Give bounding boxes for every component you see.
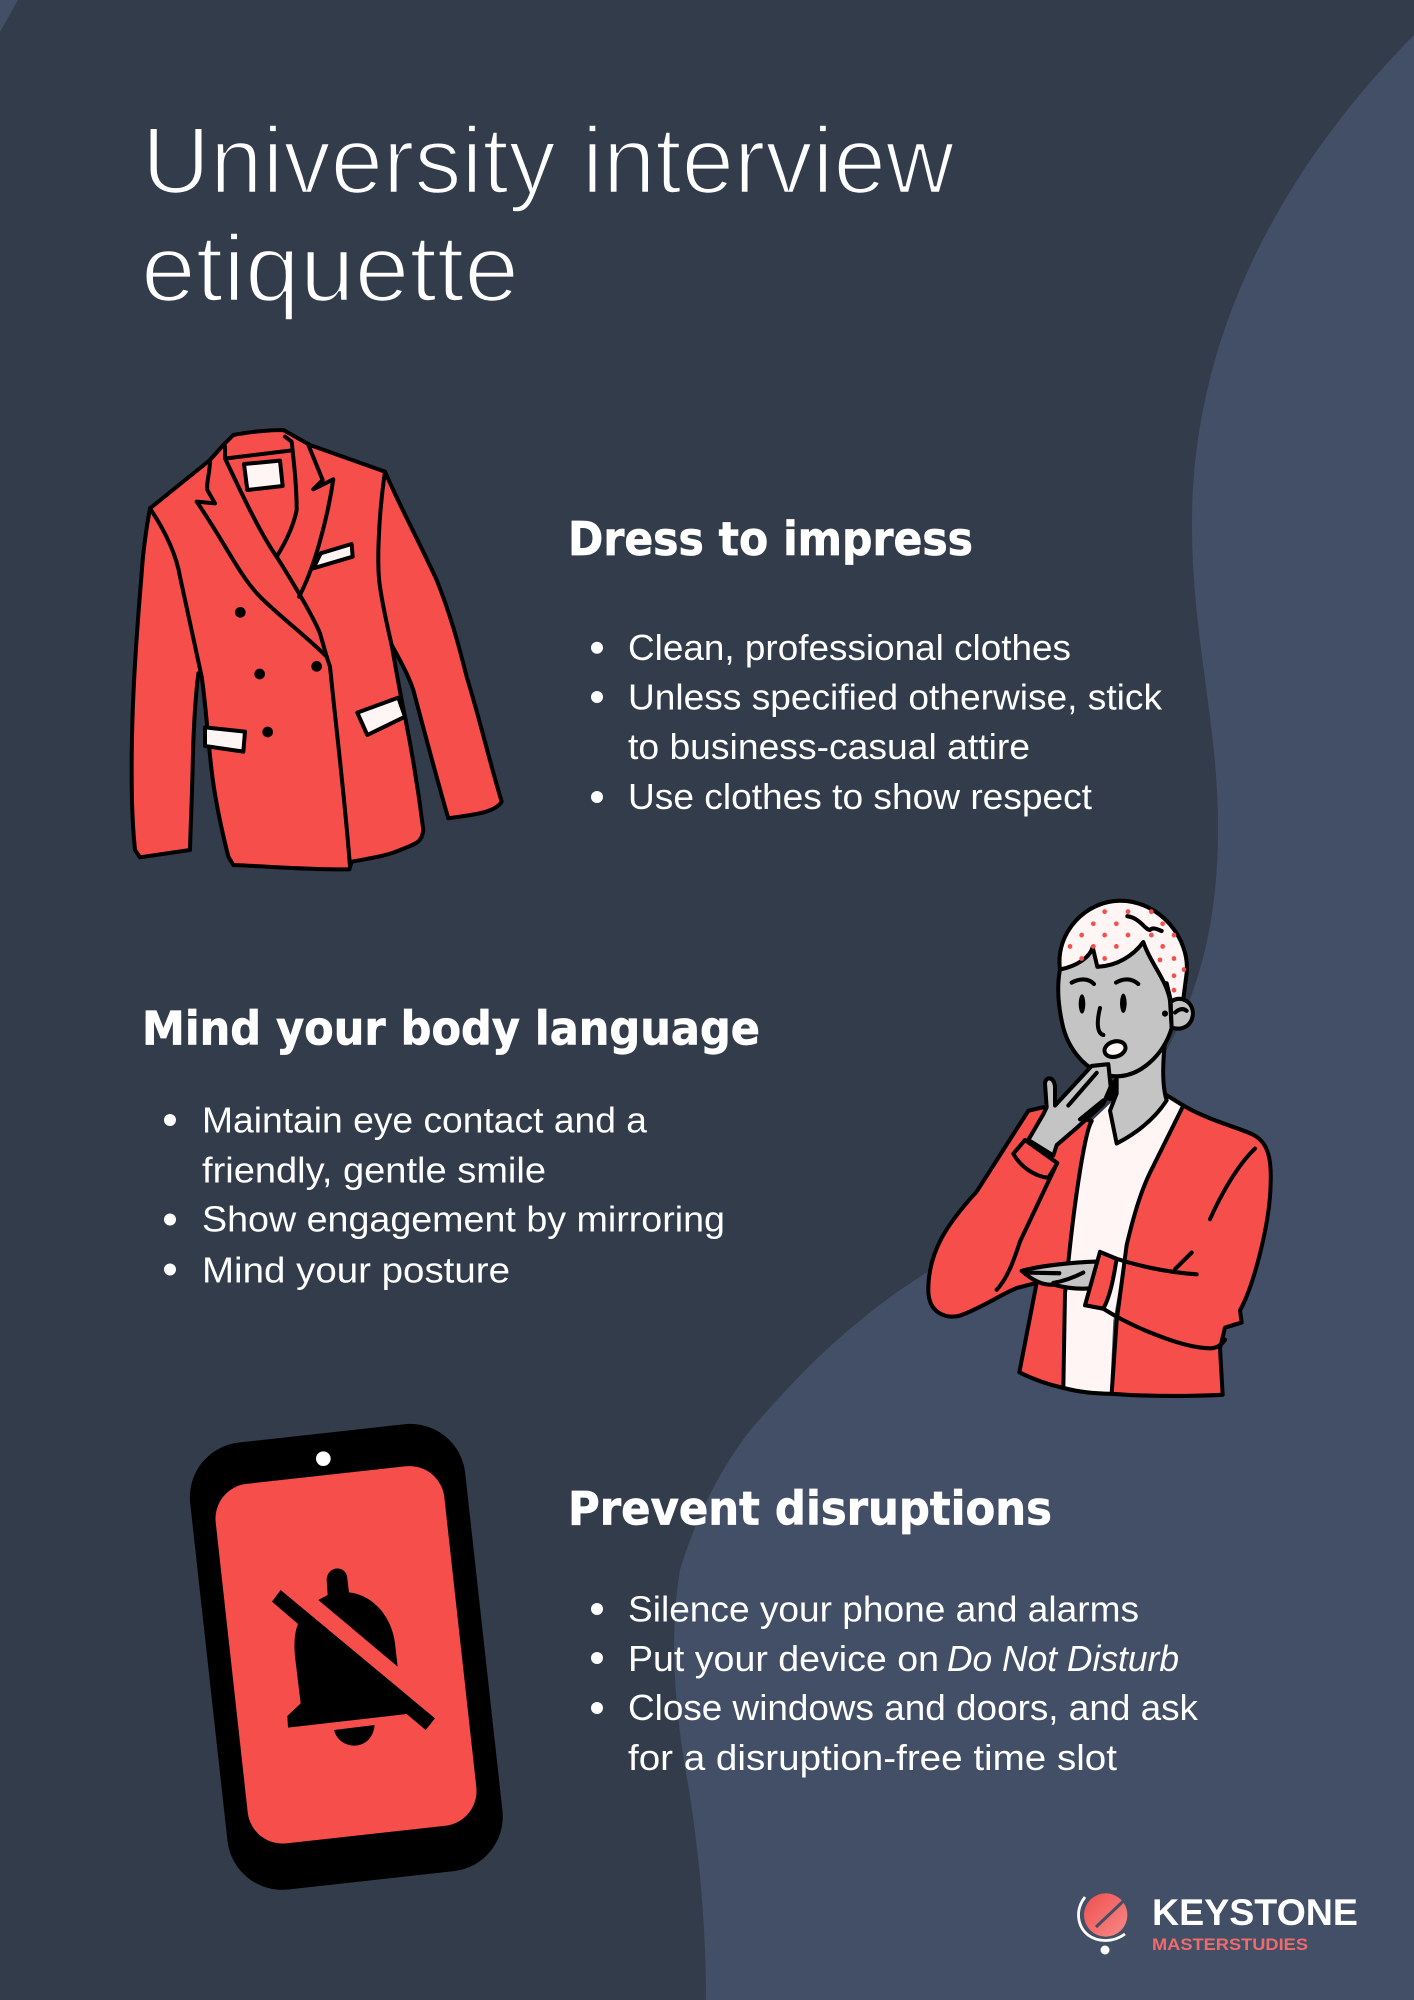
list: body language: Mind your posture (202, 1249, 510, 1290)
list: prevent disruptions: Do Not Disturb (947, 1638, 1179, 1679)
shirt (1063, 1095, 1183, 1393)
hair dots (1068, 909, 1186, 993)
list: body language: Maintain eye contact and a (202, 1100, 648, 1141)
heading: dress to impress: Dress to impress (568, 512, 973, 566)
head (1059, 901, 1187, 1011)
logo: keystone masterstudies (1079, 1892, 1358, 1954)
heading: mind your body language: Mind your body language (142, 1001, 760, 1055)
list: body language (164, 1100, 725, 1290)
buttons (235, 607, 322, 737)
bell (272, 1569, 435, 1746)
title: University interview (142, 108, 954, 214)
logo: keystone masterstudies: MASTERSTUDIES (1152, 1935, 1308, 1954)
list: prevent disruptions: Close windows and doors, and ask (628, 1687, 1199, 1728)
logo globe (1079, 1893, 1127, 1954)
list: dress to impress: to business-casual attire (628, 726, 1030, 767)
illustration: thinking person (928, 901, 1271, 1396)
lower sleeve details (1085, 1252, 1117, 1309)
title (141, 108, 954, 322)
list: prevent disruptions (591, 1589, 1199, 1778)
logo: keystone masterstudies: KEYSTONE (1152, 1892, 1358, 1933)
face features (1072, 979, 1138, 1059)
cardigan right panel (1112, 1106, 1271, 1396)
list: body language: Show engagement by mirroring (202, 1199, 725, 1240)
icon: red blazer (132, 430, 502, 869)
list: dress to impress: Unless specified otherwise, stick (628, 676, 1163, 717)
label and pocket patches (205, 461, 405, 752)
list: dress to impress: Use clothes to show respect (628, 776, 1092, 817)
ear (1171, 999, 1193, 1029)
list: prevent disruptions: for a disruption-free time slot (628, 1737, 1117, 1778)
cardigan left panel (928, 1107, 1092, 1388)
list: dress to impress: Clean, professional clothes (628, 627, 1071, 668)
raised cuff (1013, 1140, 1057, 1178)
list: body language: friendly, gentle smile (202, 1149, 546, 1190)
title: etiquette (141, 216, 519, 322)
icon: phone with muted bell (184, 1418, 508, 1895)
list: prevent disruptions: Put your device on (628, 1638, 939, 1679)
lower hand (1022, 1262, 1100, 1289)
list: dress to impress (591, 627, 1163, 817)
raised hand (1028, 1064, 1111, 1155)
list: prevent disruptions: Silence your phone and alarms (628, 1589, 1139, 1630)
neck (1110, 1042, 1167, 1143)
heading: prevent disruptions: Prevent disruptions (568, 1481, 1052, 1535)
